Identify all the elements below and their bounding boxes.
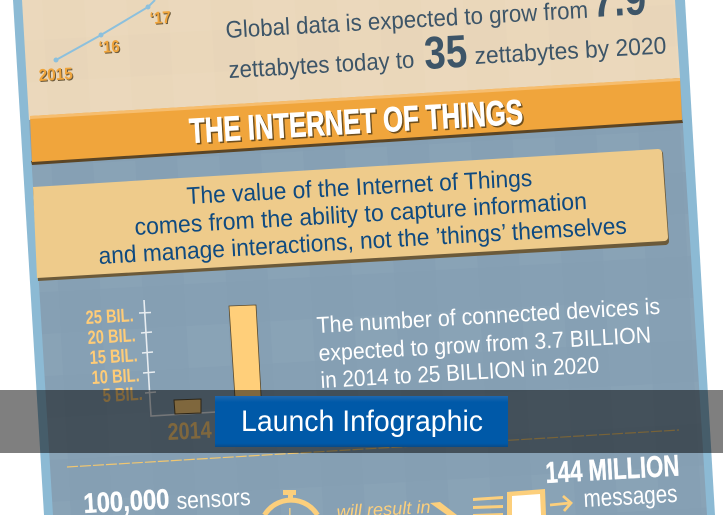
messages text: messages — [583, 480, 678, 513]
bar chart: connected devices — [85, 300, 262, 446]
line chart: data growth: 2015 — [39, 65, 74, 86]
connected devices text: in 2014 to 25 BILLION in 2020 — [320, 351, 600, 393]
heading: THE INTERNET OF THINGS — [190, 94, 525, 152]
bar 2014 — [174, 399, 201, 414]
connected devices text: expected to grow from 3.7 BILLION — [318, 321, 652, 366]
sensors text: sensors — [176, 484, 251, 515]
icon: chevron arrow — [430, 502, 457, 515]
data growth text: 35 — [423, 25, 468, 79]
heading: THE INTERNET OF THINGS — [188, 93, 524, 151]
icon: message conversion — [473, 489, 571, 515]
callout text: and manage interactions, not the ’things’ themselves — [98, 213, 627, 270]
axis — [139, 300, 216, 416]
line chart: data growth: ‘16 — [99, 38, 121, 58]
messages text: 144 MILLION — [545, 450, 680, 490]
messages text — [545, 450, 680, 513]
panel: internet of things — [29, 78, 707, 515]
dashed divider — [67, 430, 679, 467]
line chart: data growth: ‘17 — [149, 8, 171, 28]
data growth text — [225, 0, 667, 84]
launch button: Launch Infographic — [241, 405, 483, 438]
callout text: The value of the Internet of Things — [186, 165, 533, 210]
sensors text — [83, 483, 251, 515]
line chart: data growth: 2015 — [38, 64, 73, 85]
line chart: data growth — [38, 0, 172, 86]
bar 2020 — [229, 305, 262, 413]
callout box — [33, 149, 669, 281]
axis labels: 10 BIL. — [91, 365, 140, 389]
section banner — [30, 78, 683, 165]
callout text — [98, 165, 627, 270]
axis labels — [85, 305, 143, 407]
axis labels: 5 BIL. — [102, 384, 143, 407]
icon: stopwatch — [264, 490, 318, 515]
panel: data growth — [22, 0, 680, 120]
connected devices text: The number of connected devices is — [316, 293, 661, 338]
axis labels: 20 BIL. — [87, 325, 136, 349]
line chart: data growth: ‘16 — [98, 37, 120, 57]
year label: 2014 — [167, 417, 213, 446]
connected devices text — [316, 293, 661, 393]
callout text: comes from the ability to capture information — [134, 188, 588, 241]
axis labels: 25 BIL. — [85, 305, 134, 329]
line chart: data growth: ‘17 — [150, 9, 172, 29]
axis labels: 15 BIL. — [89, 345, 138, 369]
data growth text: zettabytes by 2020 — [474, 32, 667, 70]
launch button — [215, 396, 508, 447]
data growth text: zettabytes today to — [228, 47, 415, 84]
heading — [188, 93, 525, 152]
overlay band — [0, 390, 723, 453]
